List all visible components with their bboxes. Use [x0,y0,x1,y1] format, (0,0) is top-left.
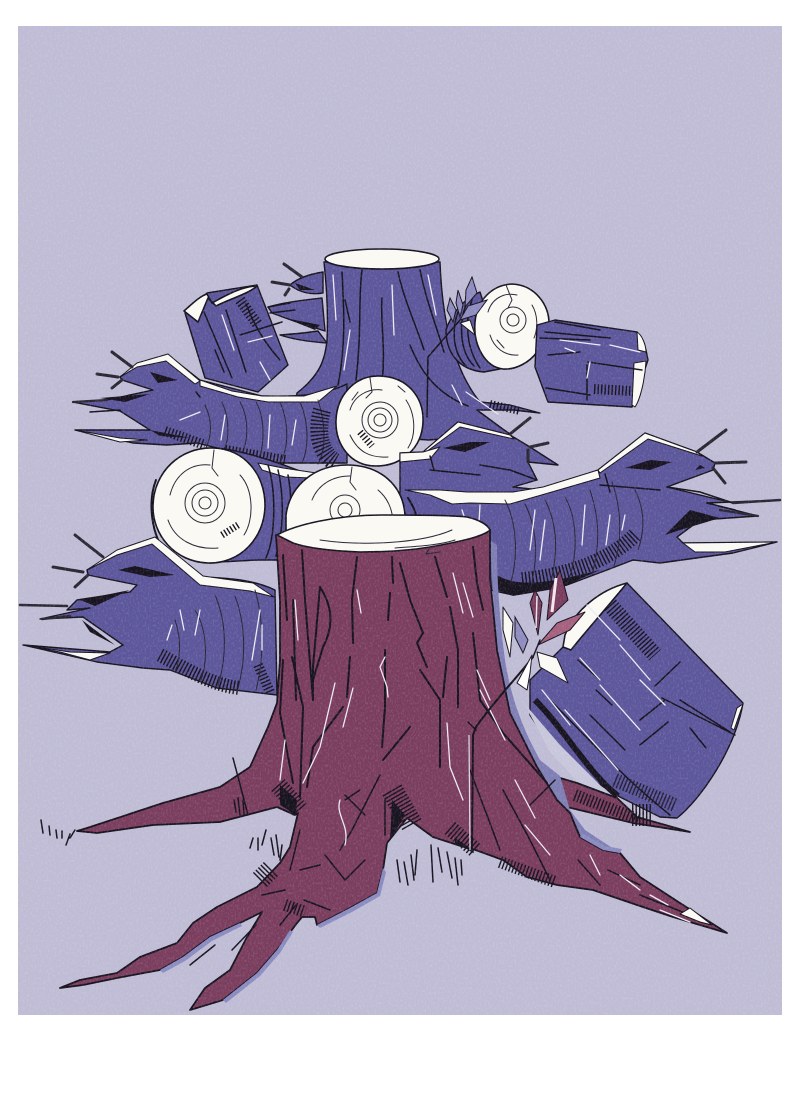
grass tufts [41,758,462,885]
log body and roots [73,355,347,463]
blue offset shadow of front stump [490,540,620,860]
dark hatching at root joins [278,785,300,810]
blue underside rims [160,833,622,1003]
front maroon stump [60,515,727,1010]
stump cut top [277,515,490,552]
pale highlights [280,573,690,922]
sapling with leaves [468,570,585,850]
chunk on the right [535,320,648,407]
back sapling stem and leaves [427,277,487,417]
long right log [400,418,780,596]
bark lines [280,547,547,797]
right root behind front stump [550,775,690,832]
upper middle log [73,352,423,466]
small log upper left [184,285,288,392]
light gap strip beside the chunk [524,703,612,797]
left stacked log with cut face [152,448,323,563]
lower right chunk [530,583,743,818]
lower left log with roots [20,535,277,695]
back purple stump [268,249,540,440]
centre stacked log cut face [286,465,418,540]
back stump root twigs [268,264,327,343]
upper right log with cut face [446,284,549,372]
